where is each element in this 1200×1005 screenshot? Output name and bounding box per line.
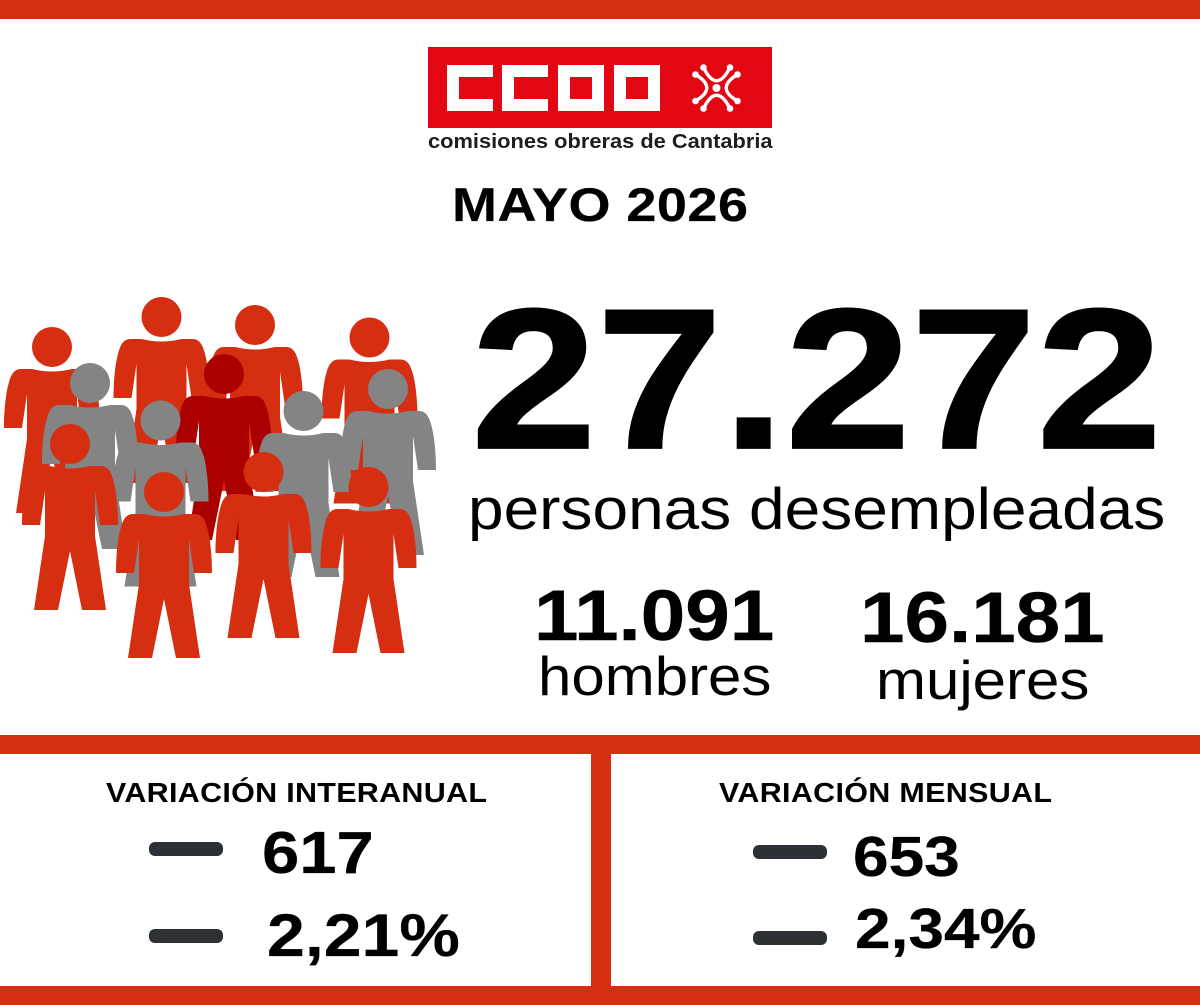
divider bars <box>0 735 1200 1005</box>
panel: monthly variation <box>719 776 1052 960</box>
monthly percent value: 2,34% <box>855 896 1036 960</box>
title: month: MAYO 2026 <box>452 178 748 231</box>
total unemployed label: personas desempleadas <box>468 476 1165 542</box>
men count: 11.091 <box>534 576 774 656</box>
logo: CCOO Cantabria: comisiones obreras de Cantabria <box>428 131 773 153</box>
men label: hombres <box>538 646 771 707</box>
icon: crowd of people <box>4 297 436 658</box>
monthly absolute value: 653 <box>853 824 960 888</box>
icon: minus sign <box>753 845 827 859</box>
icon: minus sign <box>149 929 223 943</box>
panel: annual variation <box>106 776 487 969</box>
heading: monthly variation: VARIACIÓN MENSUAL <box>719 776 1052 809</box>
logo: CCOO Cantabria <box>428 47 773 153</box>
annual percent value: 2,21% <box>267 901 460 969</box>
annual absolute value: 617 <box>262 820 374 886</box>
heading: annual variation: VARIACIÓN INTERANUAL <box>106 776 487 809</box>
top bar <box>0 0 1200 19</box>
icon: minus sign <box>753 931 827 945</box>
women count: 16.181 <box>860 578 1105 658</box>
women label: mujeres <box>876 650 1089 711</box>
total unemployed number: 27.272 <box>471 268 1162 491</box>
icon: minus sign <box>149 842 223 856</box>
